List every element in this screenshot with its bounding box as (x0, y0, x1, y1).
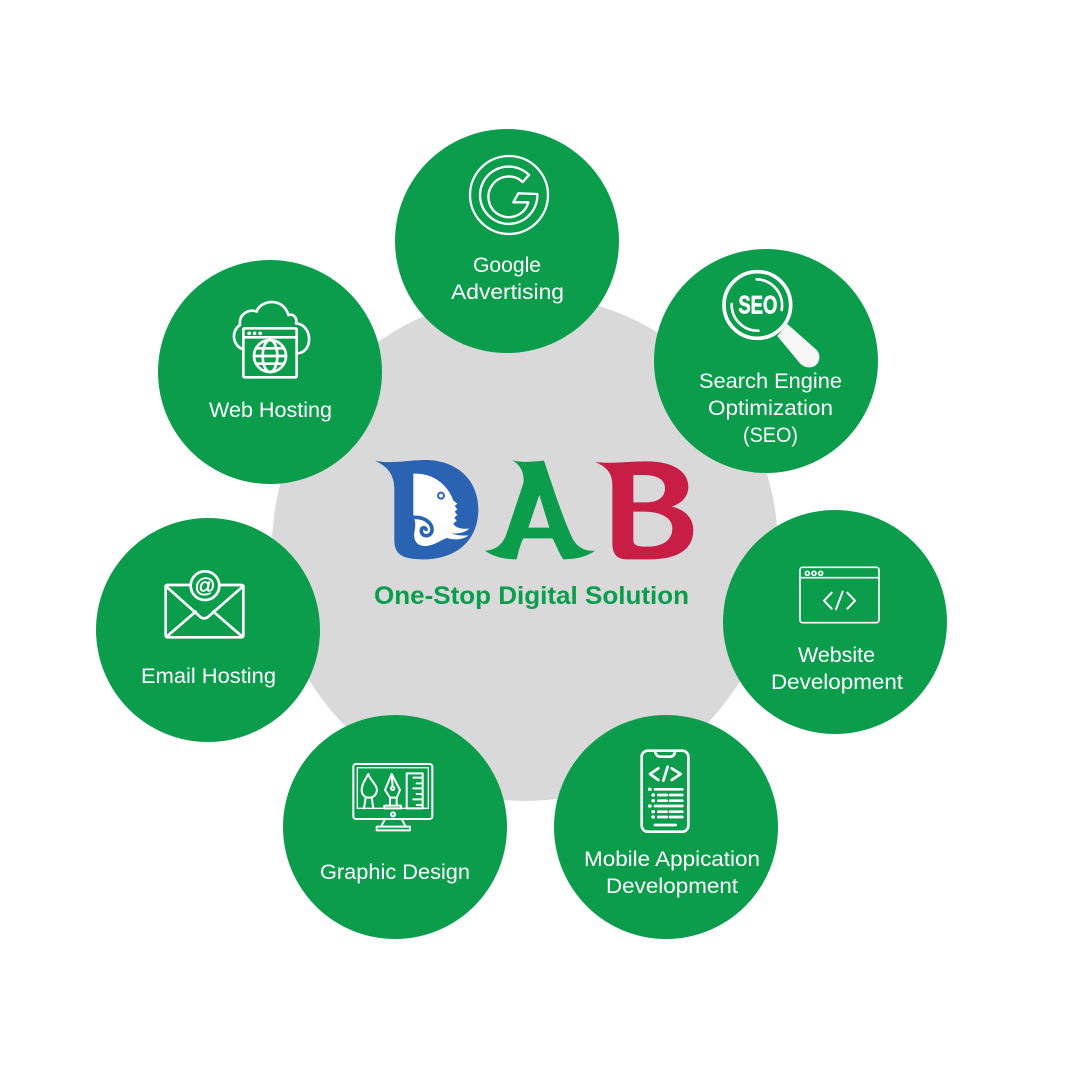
panel: Graphic Design (283, 715, 507, 939)
label: Email Hosting (141, 665, 276, 688)
icon: SEO magnifier: SEO (738, 291, 777, 319)
label (451, 254, 564, 304)
label: Website (798, 644, 875, 667)
icon: SEO magnifier (724, 272, 819, 367)
label: Search Engine (699, 370, 842, 393)
icon: Google G (470, 156, 548, 234)
icon: envelope with at sign (166, 571, 243, 637)
logo: DAB (375, 460, 693, 559)
label: Google (473, 254, 541, 277)
panel: Google Advertising (395, 129, 619, 353)
icon: phone with code (642, 751, 688, 832)
icon: design monitor (353, 764, 432, 830)
icon: browser code window (800, 567, 879, 623)
label: Graphic Design (320, 861, 470, 884)
label: Advertising (451, 281, 564, 304)
tagline: One-Stop Digital Solution (374, 582, 689, 610)
label: Development (771, 671, 903, 694)
label: Optimization (708, 397, 833, 420)
panel: Web Hosting (158, 260, 382, 484)
panel: Website Development (723, 510, 947, 734)
logo letter D with elephant (375, 460, 478, 559)
label: (SEO) (743, 424, 798, 447)
panel: Email Hosting (96, 518, 320, 742)
icon: envelope with at sign: @ (195, 575, 215, 598)
logo letter B (595, 461, 693, 559)
label: Web Hosting (209, 399, 332, 422)
panel: Search Engine Optimization (654, 249, 878, 473)
label (699, 370, 842, 447)
label: Development (606, 875, 738, 898)
label (771, 644, 903, 694)
panel: Mobile Application Development (554, 715, 778, 939)
logo letter A (485, 460, 595, 559)
label (584, 848, 760, 898)
label: Mobile Appication (584, 848, 760, 871)
icon: cloud and globe window (234, 302, 309, 377)
central grey circle (272, 295, 778, 801)
